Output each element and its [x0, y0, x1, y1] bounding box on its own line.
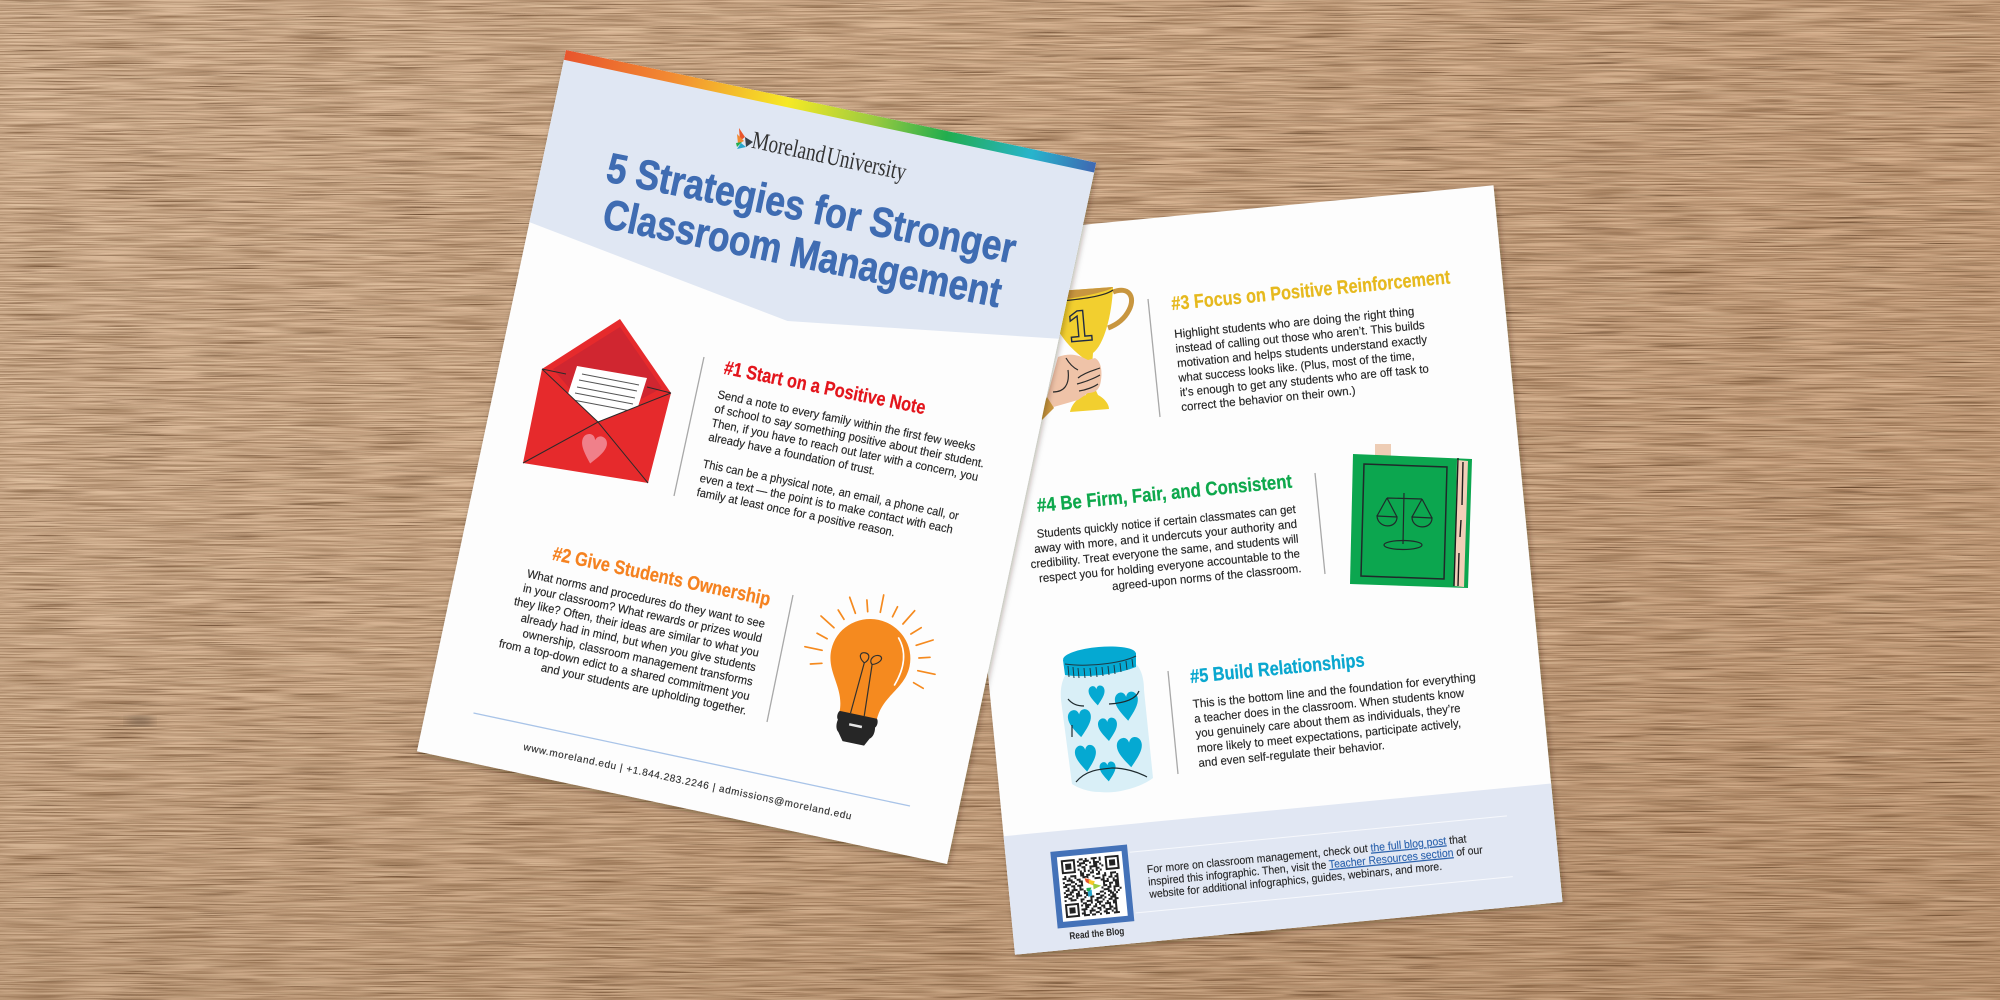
text: strategy 4: [1027, 502, 1303, 601]
text: strategy 1: of school to say something positive about their student.: [713, 401, 986, 470]
icon: trophy: [1041, 287, 1132, 420]
text: footer resources: inspired this infographic. Then, visit the Teacher Resources section of our: [1148, 844, 1483, 889]
text: strategy 1: family at least once for a positive reason.: [696, 485, 896, 539]
text: strategy 4: respect you for holding everyone accountable to the: [1038, 546, 1301, 585]
text: strategy 1: Send a note to every family within the first few weeks: [716, 387, 977, 454]
QR code with caption: Read the Blog: [1069, 926, 1125, 942]
text: strategy 2: in your classroom? What rewards or prizes would: [522, 581, 763, 645]
text: footer resources: For more on classroom management, check out the full blog post that: [1146, 833, 1468, 876]
text: strategy 3: [1173, 303, 1432, 414]
QR code with caption: [1050, 844, 1136, 943]
text: strategy 5: more likely to meet expectations, participate actively,: [1196, 716, 1462, 755]
text: strategy 3: correct the behavior on their own.): [1181, 383, 1356, 414]
icon: trophy: 1: [1066, 301, 1094, 352]
text: footer resources: website for additional infographics, guides, webinars, and more.: [1148, 861, 1443, 901]
text: strategy 3: what success looks like. (Plus, most of the time,: [1177, 348, 1415, 385]
text: strategy 2: already had in mind, but when you give students: [520, 611, 757, 674]
heading: start on a positive note: #1 Start on a Positive Note: [722, 357, 928, 419]
heading: build relationships: #5 Build Relationships: [1189, 649, 1366, 688]
sheet background and header band: [417, 50, 1096, 864]
text: strategy 4: agreed-upon norms of the classroom.: [1111, 561, 1302, 593]
text: strategy 2: and your students are upholding together.: [540, 660, 748, 718]
text: strategy 5: a teacher does in the classroom. When students know: [1194, 686, 1465, 726]
text: strategy 1: [696, 387, 989, 554]
logo: Moreland University: [750, 127, 909, 186]
panel: front sheet: [417, 50, 1096, 864]
footer divider and contact line: [474, 713, 910, 822]
text: strategy 1: even a text — the point is to make contact with each: [699, 471, 954, 536]
text: strategy 3: it’s enough to get any students who are off task to: [1179, 361, 1430, 399]
icon: law book with scales: [1350, 444, 1472, 588]
heading: be firm fair consistent: #4 Be Firm, Fair, and Consistent: [1036, 470, 1293, 517]
title: Classroom Management: [599, 190, 1006, 316]
text: strategy 2: [495, 564, 767, 718]
text: footer resources: [1146, 832, 1485, 901]
text: strategy 1: already have a foundation of trust.: [707, 430, 877, 478]
text: strategy 2: from a top-down edict to a shared commitment you: [498, 636, 751, 703]
text: strategy 3: Highlight students who are doing the right thing: [1174, 304, 1415, 341]
icon: light bulb: [805, 595, 935, 751]
title: 5 Strategies for Stronger: [603, 144, 1020, 272]
text: strategy 4: Students quickly notice if certain classmates can get: [1036, 502, 1297, 541]
text: strategy 4: away with more, and it undercuts your authority and: [1034, 517, 1298, 556]
text: strategy 5: [1192, 670, 1482, 770]
text: strategy 4: credibility. Treat everyone the same, and students will: [1030, 532, 1299, 571]
icon: jar of hearts: [1061, 644, 1153, 792]
text: strategy 3: instead of calling out those who aren’t. This builds: [1175, 318, 1425, 356]
text: strategy 1: Then, if you have to reach out later with a concern, you: [710, 416, 980, 484]
text: strategy 3: motivation and helps students understand exactly: [1176, 332, 1428, 370]
heading: give students ownership: #2 Give Students Ownership: [551, 543, 772, 611]
icon: red envelope with letter: [523, 319, 671, 483]
text: strategy 5: This is the bottom line and the foundation for everything: [1192, 670, 1476, 711]
logo: [736, 127, 909, 186]
text: strategy 2: What norms and procedures do they want to see: [526, 567, 767, 631]
panel: back sheet: [946, 185, 1562, 955]
text: strategy 1: This can be a physical note, an email, a phone call, or: [702, 457, 960, 523]
footer divider and contact line: www.moreland.edu | +1.844.283.2246 | admissions@moreland.edu: [521, 742, 852, 822]
text: strategy 2: they like? Often, their ideas are similar to what you: [513, 594, 760, 660]
heading: focus on positive reinforcement: #3 Focus on Positive Reinforcement: [1170, 266, 1452, 315]
text: strategy 5: you genuinely care about them as individuals, they’re: [1195, 701, 1461, 740]
text: strategy 5: and even self-regulate their behavior.: [1198, 738, 1385, 770]
sheet background: [946, 185, 1562, 955]
text: strategy 2: ownership, classroom management transforms: [521, 626, 754, 689]
